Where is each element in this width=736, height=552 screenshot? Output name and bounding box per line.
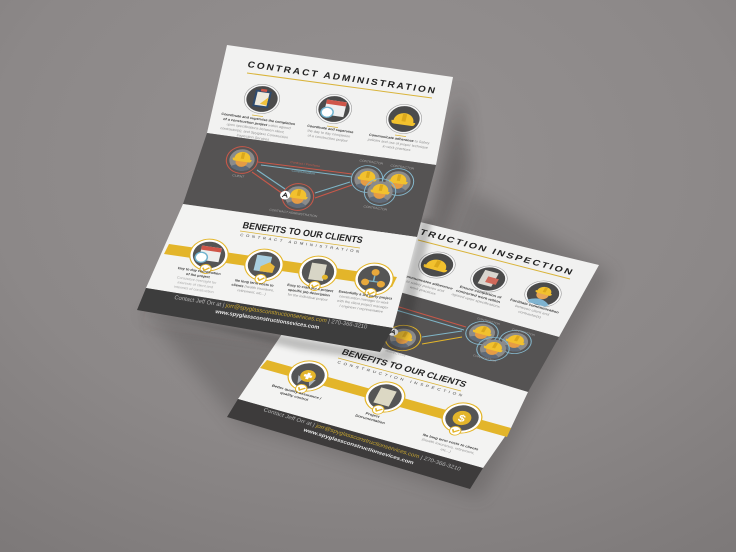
sheet 1 benefit text: third party: / engineer / representative: [339, 304, 384, 314]
sheet 2 benefit text: quality: Better quality assurance /: [271, 384, 323, 401]
sheet 2 benefit icon: dollar: $: [456, 413, 468, 425]
sheet 2 person: contractor one: [461, 318, 503, 348]
sheet 1 top white panel: [207, 45, 453, 165]
sheet 2 top white panel: [370, 210, 599, 337]
sheet 1 benefit text: coordination: of the project: [186, 272, 211, 279]
sheet 2 person: inspection: [380, 322, 426, 354]
sheet 1 title rule: [247, 73, 432, 98]
sheet 2 diagram labels: CONTRACTOR: [472, 354, 498, 363]
sheet 1 text: supervise project: contractor(s), and Spyglass Construction: [220, 126, 289, 139]
sheet 2 text: completion: Ensure completion of: [459, 285, 503, 300]
sheet 1 benefit text: coordination: [172, 266, 221, 294]
sheet 2 text: safety adherence: [397, 274, 453, 299]
sheet 1 person: client: [224, 145, 260, 175]
sheet 1 benefits heading: BENEFITS TO OUR CLIENTS: [241, 221, 364, 246]
sheet 2 benefits heading: BENEFITS TO OUR CLIENTS: [340, 348, 468, 390]
sheet 1 text: day to day: of a construction project: [307, 134, 348, 143]
sheet 2 text: safety adherence: work practices: [409, 286, 437, 296]
sheet 1 benefit icon: calendar: [186, 237, 232, 276]
sheet 2 benefits panel: [238, 260, 528, 468]
sheet 1 person: contractor two: [380, 167, 416, 197]
sheet 1 benefit text: third party: [334, 290, 393, 315]
sheet 1 benefit text: job description: for the individual project: [287, 293, 328, 302]
sheet 1 benefit text: coordination: Consistent oversight for: [176, 276, 218, 285]
sheet 1 arrow labels: Contract / Purchase: [290, 160, 321, 168]
sheet shadow on lower sheet: [137, 220, 432, 362]
sheet 2 text: completion: [451, 284, 505, 309]
sheet 2 title: TRUCTION INSPECTION: [418, 228, 574, 277]
icon: clipboard: [241, 82, 283, 116]
sheet 1 benefits subtitle: CONTRACT ADMINISTRATION: [240, 232, 360, 254]
sheet 1 benefit text: costs: clients (health insurance,: [231, 283, 275, 293]
sheet 1 text: day to day: [304, 124, 354, 143]
sheet 2 footer contact: Contact Jeff Orr at | jorr@spyglassconstructionservices.com | 270-366-3210: [262, 408, 462, 473]
sheet 1 text: supervise project: of a construction project within agreed: [223, 117, 291, 130]
sheet 2 heading rule: [338, 358, 461, 391]
icon: document: [465, 262, 513, 296]
sheet 2 grey diagram panel: [355, 287, 559, 392]
sheet 2 person: contractor three: [472, 334, 514, 364]
sheet 2 diagram labels: CONTRACTOR: [476, 317, 502, 326]
sheet 1 benefit icon: documents: [295, 254, 341, 293]
sheet 1 diagram labels: CONTRACT ADMINISTRATION: [269, 208, 318, 218]
sheet 1 text: supervise project: upon specifications between client,: [226, 122, 285, 134]
sheet 1 heading rule: [240, 231, 360, 248]
sheet 1 arrow labels: [290, 160, 321, 176]
sheet shadows: [140, 90, 612, 498]
sheet 2 diagram labels: INSPECTION: [385, 349, 406, 357]
sheet 2 text: completion: agreed upon specifications: [451, 293, 501, 309]
sheet 2 person: contractor two: [494, 327, 536, 357]
sheet 1 benefit icon: org chart: [351, 261, 397, 300]
sheet 1 benefit text: coordination: interests of construction: [174, 285, 214, 294]
sheet 2 benefit text: documentation: Project: [365, 412, 381, 419]
sheet 2 benefit icon: dollar: [435, 399, 488, 440]
sheet 1 text: safety: in work practices: [382, 145, 411, 152]
sheet 2 benefit text: documentation: [354, 410, 389, 425]
sheet 2 footer: [227, 399, 483, 489]
sheet 2 diagram labels: CONTRACTOR: [511, 328, 537, 337]
sheet 1 benefit text: coordination: Day to day coordination: [177, 266, 221, 276]
sheet 1 benefit text: third party: Essentially a 3rd party project: [338, 290, 393, 301]
sheet 1 arrow labels: Communication: [291, 169, 316, 176]
sheet 1 benefit text: costs: [230, 278, 276, 297]
sheet 1 benefit text: third party: construction manager to work: [339, 294, 389, 305]
sheet 1 text: safety: policies and use of proper technique: [367, 138, 429, 150]
sheet 2 benefit icon: documents: [358, 378, 411, 419]
sheet 1 grey diagram panel: [183, 133, 436, 237]
sheet 1 diagram labels: CONTRACTOR: [359, 159, 384, 166]
sheet 1 text: safety: Communicate adherence to Safety: [369, 133, 430, 145]
sheet 1 footer website: www.spyglassconstructionsevices.com: [214, 309, 320, 331]
sheet 2 benefit text: costs: No long term costs to clients: [422, 433, 479, 451]
sheet 1 person: contractor one: [349, 164, 385, 194]
sheet 2 benefit text: costs: etc...): [440, 448, 452, 454]
sheet 2 text: safety adherence: to safety policies and: [405, 280, 445, 293]
sheet 2 benefit text: costs: (health insurance, retirement,: [421, 438, 475, 455]
sheet 1 text: supervise project: [215, 112, 296, 144]
sheet 2 benefit text: quality: quality control: [279, 391, 309, 402]
sheet 2 benefit text: costs: [417, 433, 479, 460]
sheet 1 benefit text: costs: retirement, etc...): [237, 288, 266, 296]
sheet 1 benefit text: job description: Easy to craft out a project: [287, 283, 335, 293]
sheet 1 text: day to day: Coordinate and supervise: [307, 124, 354, 134]
sheet 1 title: CONTRACT ADMINISTRATION: [246, 60, 436, 96]
sheet 1 benefit text: third party: with the client project manager: [337, 299, 389, 310]
sheet 2 text: communication: contractor(s): [517, 310, 543, 319]
sheet 1 diagram labels: CLIENT: [232, 173, 245, 179]
sheet 1 diagram labels: CONTRACTOR: [390, 164, 415, 171]
sheet 2 diagram labels: [385, 317, 537, 363]
icon: hard hat: [413, 248, 461, 282]
sheet 1 arrows: [252, 162, 352, 198]
sheet 1 text: supervise project: Inspection Services: [236, 133, 270, 142]
sheet 2 text: communication: [505, 298, 560, 323]
icon: calendar and clock: [313, 92, 355, 126]
sheet 1 text: supervise project: Coordinate and supervise the completion: [221, 112, 296, 126]
sheet 2 yellow band: [260, 360, 511, 437]
sheet 1 text: day to day: the day to day completion: [307, 129, 351, 139]
sheet 2 footer website: www.spyglassconstructionsevices.com: [301, 427, 415, 466]
sheet 1 benefit text: job description: specific job description: [287, 288, 330, 297]
sheet 1 person: contractor three: [362, 177, 398, 207]
sheet 1 yellow band: [164, 244, 397, 287]
sheet 1 benefit icon: paperwork: [241, 247, 287, 286]
sheet 1 benefit text: costs: No long term costs to: [234, 279, 275, 288]
icon: worker: [519, 277, 567, 311]
sheet 1 footer: [137, 288, 393, 352]
sheet 1 benefit text: coordination: interests of client and: [177, 281, 213, 289]
sheet 2 title rule: [418, 240, 570, 279]
sheet 2 arrows: [396, 306, 466, 344]
sheet 1 diagram labels: [232, 159, 415, 218]
sheet 2 text: communication: between client and: [514, 304, 550, 317]
sheet 1 footer contact: Contact Jeff Orr at | jorr@spyglassconstructionservices.com | 270-366-3210: [173, 295, 368, 331]
sheet 1 person: contract administration: [277, 181, 316, 212]
sheet 2 text: completion: contracted work within: [455, 289, 502, 304]
sheet 2 benefit icon: quality: [281, 357, 334, 398]
sheet: contract administration: [137, 45, 453, 352]
icon: hard hat: [383, 102, 425, 136]
sheet 1 diagram labels: CONTRACTOR: [363, 205, 388, 212]
sheet 2 benefits subtitle: CONSTRUCTION INSPECTION: [337, 360, 463, 397]
sheet 1 benefit text: job description: [284, 283, 335, 302]
sheet: construction inspection: [227, 210, 599, 489]
sheet 1 text: safety: [366, 133, 430, 154]
sheet 1 benefits panel: [146, 204, 417, 328]
sheet 2 benefit text: documentation: Documentation: [354, 414, 386, 425]
sheet 1 small accent dashes: [252, 115, 406, 137]
sheet 2 text: safety adherence: Communicates adherence: [401, 274, 453, 291]
sheet 2 text: communication: Facilitate communication: [509, 298, 560, 314]
